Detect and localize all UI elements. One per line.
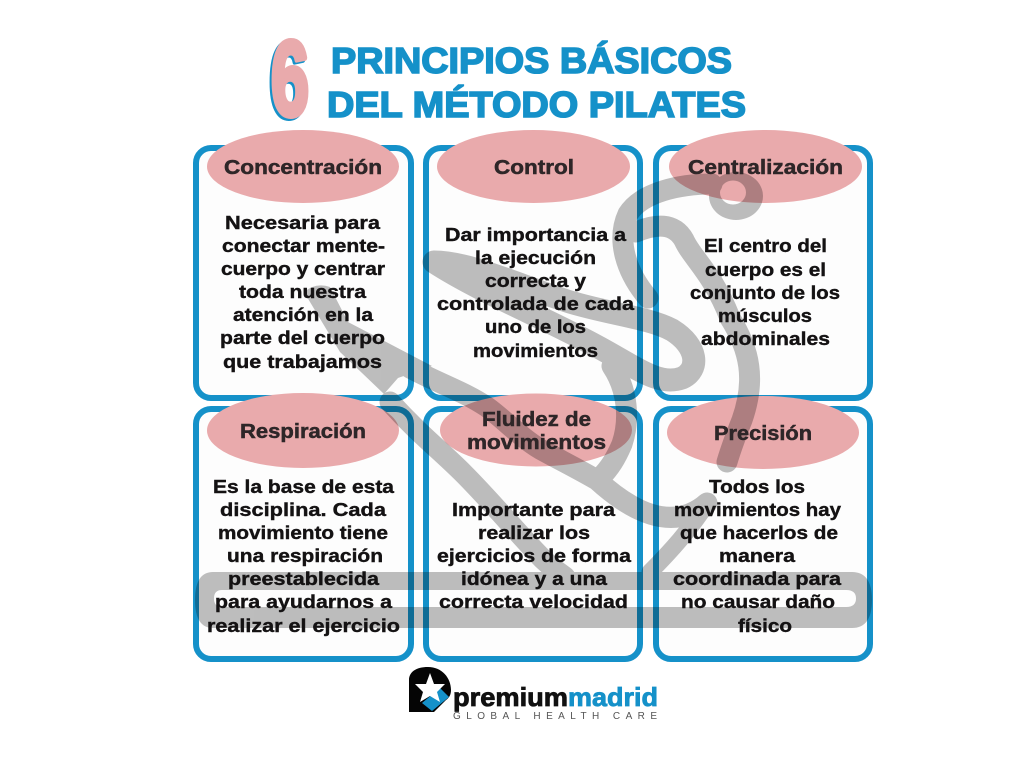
big number 6: 6 bbox=[271, 20, 309, 138]
text block: movimientos bbox=[473, 340, 598, 361]
text block: físico bbox=[738, 615, 792, 636]
heading: Concentración bbox=[224, 157, 382, 179]
text block: realizar los bbox=[478, 522, 590, 543]
text block: conectar mente- bbox=[222, 235, 385, 256]
text block: ejercicios de forma bbox=[437, 545, 632, 566]
heading: Control bbox=[494, 157, 574, 179]
text block: toda nuestra bbox=[239, 281, 367, 302]
text block: Todos los bbox=[709, 476, 805, 497]
panel: Control bbox=[437, 157, 635, 361]
panel: Concentración bbox=[220, 157, 385, 372]
text block: la ejecución bbox=[475, 247, 596, 268]
icon: logo badge bbox=[409, 667, 451, 712]
text block bbox=[690, 235, 840, 349]
heading line 2: DEL MÉTODO PILATES bbox=[327, 84, 746, 125]
text block: Es la base de esta bbox=[213, 476, 395, 497]
text block: abdominales bbox=[701, 328, 830, 349]
panel: Centralización bbox=[688, 157, 843, 349]
text block: coordinada para bbox=[673, 568, 842, 589]
logo: premiummadrid bbox=[409, 667, 658, 722]
text block: una respiración bbox=[227, 545, 383, 566]
big number 6: 6 bbox=[269, 22, 307, 140]
title bbox=[269, 20, 746, 140]
heading: Precisión bbox=[714, 423, 812, 445]
text block: parte del cuerpo bbox=[220, 327, 385, 348]
text block: realizar el ejercicio bbox=[207, 615, 400, 636]
text block: movimiento tiene bbox=[218, 522, 388, 543]
text block: cuerpo es el bbox=[705, 259, 826, 280]
text block: músculos bbox=[718, 305, 812, 326]
heading: Respiración bbox=[240, 421, 366, 443]
text block: que trabajamos bbox=[223, 351, 382, 372]
text block bbox=[437, 499, 632, 612]
text block: idónea y a una bbox=[461, 568, 608, 589]
icon: pilates figure watermark bbox=[195, 172, 872, 628]
text block: no causar daño bbox=[681, 591, 835, 612]
text block bbox=[207, 476, 400, 636]
text block: Dar importancia a bbox=[445, 224, 627, 245]
text block: preestablecida bbox=[228, 568, 380, 589]
text block: correcta y bbox=[485, 270, 587, 291]
text block: que hacerlos de bbox=[680, 522, 838, 543]
panel: card frames bbox=[196, 148, 870, 659]
tagline: GLOBAL HEALTH CARE bbox=[453, 711, 657, 722]
panel: Respiración bbox=[207, 421, 400, 636]
text block: cuerpo y centrar bbox=[221, 258, 385, 279]
wordmark: premium bbox=[453, 682, 568, 712]
text block bbox=[673, 476, 842, 636]
panel: Fluidez de movimientos bbox=[437, 409, 632, 612]
text block: controlada de cada bbox=[437, 293, 635, 314]
heading bbox=[467, 409, 606, 454]
heading ovals bbox=[207, 130, 862, 469]
heading: movimientos bbox=[467, 432, 606, 454]
text block: manera bbox=[719, 545, 796, 566]
big number 6 bbox=[269, 20, 309, 140]
text block: movimientos hay bbox=[674, 499, 842, 520]
text block: uno de los bbox=[485, 316, 586, 337]
heading: Centralización bbox=[688, 157, 843, 179]
text block: para ayudarnos a bbox=[215, 591, 393, 612]
heading line 1: PRINCIPIOS BÁSICOS bbox=[331, 40, 732, 81]
text block bbox=[437, 224, 635, 361]
text block: El centro del bbox=[704, 235, 827, 256]
text block: disciplina. Cada bbox=[220, 499, 387, 520]
panel: Precisión bbox=[673, 423, 842, 636]
text block: atención en la bbox=[233, 304, 374, 325]
logo: premiummadrid: madrid bbox=[568, 682, 658, 712]
text block: Importante para bbox=[452, 499, 616, 520]
text block: correcta velocidad bbox=[439, 591, 628, 612]
heading: Fluidez de bbox=[482, 409, 591, 431]
text block: Necesaria para bbox=[225, 212, 381, 233]
text block: conjunto de los bbox=[690, 282, 840, 303]
text block bbox=[220, 212, 385, 372]
